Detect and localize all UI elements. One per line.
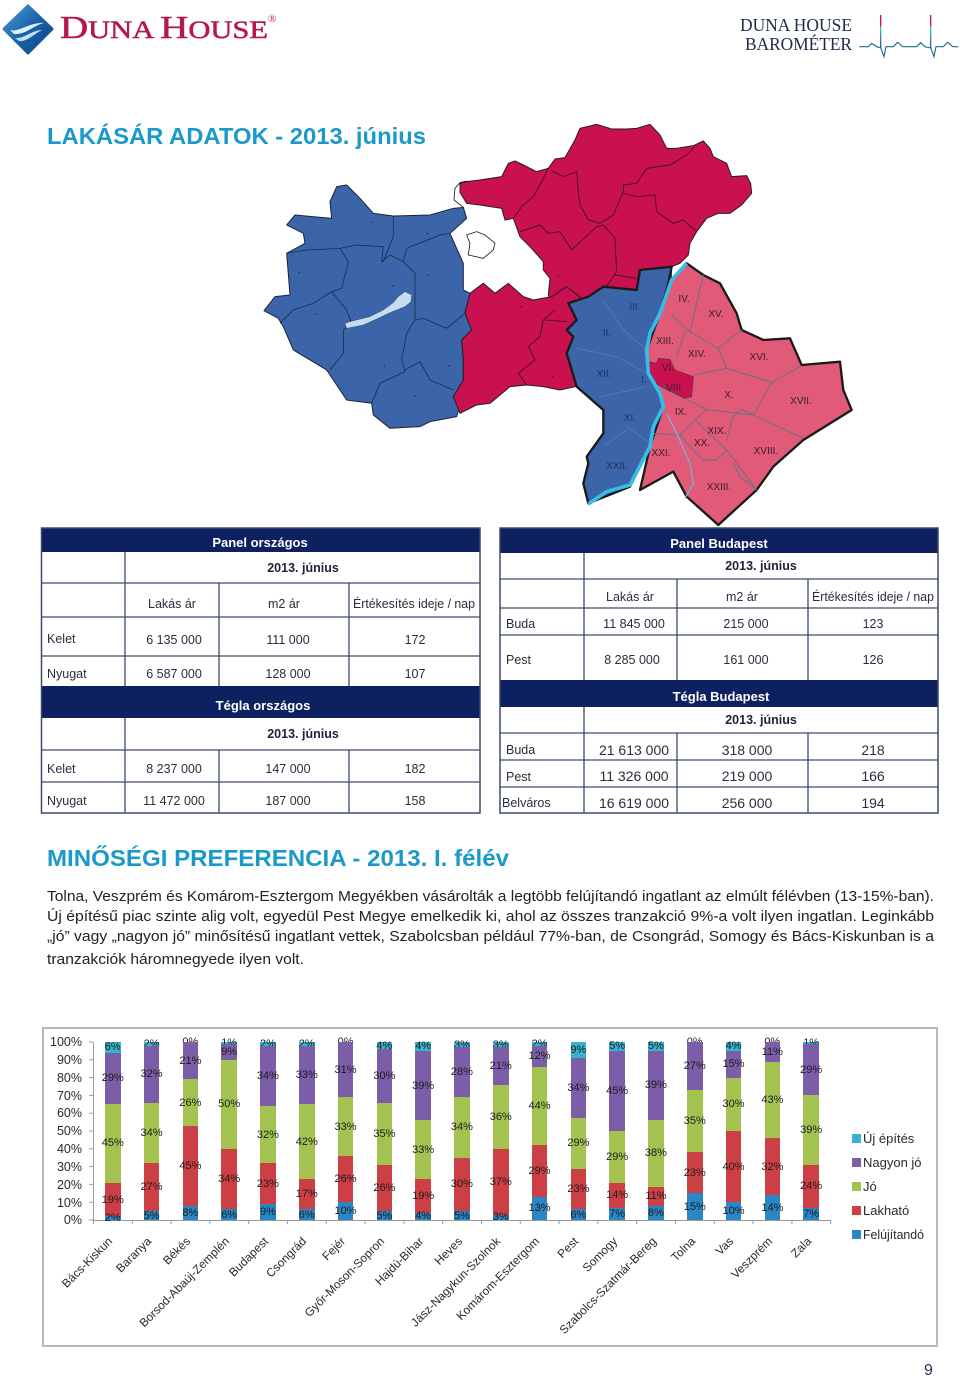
x axis county labels: Jász-Nagykun-Szolnok	[408, 1234, 503, 1329]
bar: Vas: 4%	[726, 1040, 742, 1052]
barometer wordmark: DUNA HOUSE	[740, 15, 852, 35]
map region: inner districts	[649, 358, 693, 398]
table: national prices: Kelet	[47, 762, 76, 776]
table: national prices: m2 ár	[268, 597, 300, 611]
y axis labels: 70%	[57, 1089, 82, 1103]
bar: Veszprém: 14%	[761, 1202, 783, 1214]
bar: Budapest: 9%	[260, 1206, 276, 1218]
text block: summary paragraph	[47, 889, 935, 968]
bar: Budapest: 32%	[257, 1129, 279, 1141]
x axis county labels: Szabolcs-Szatmár-Bereg	[556, 1234, 659, 1337]
y axis labels: 90%	[57, 1053, 82, 1067]
table: national prices: 147 000	[265, 762, 311, 776]
map markers: county seats	[299, 222, 559, 397]
legend: Új építés	[863, 1131, 915, 1146]
x axis county labels: Komárom-Esztergom	[453, 1234, 542, 1323]
district labels: Buda	[596, 302, 647, 472]
bar: Pest	[567, 1042, 589, 1221]
district labels: Pest: X.	[724, 390, 734, 401]
bar: Jász-Nagykun-Szolnok: 37%	[490, 1176, 512, 1188]
table header: Panel Budapest: Panel Budapest	[670, 536, 768, 551]
table: national prices: 182	[405, 762, 425, 776]
bar: Veszprém	[761, 1036, 783, 1220]
table: Budapest prices: 126	[863, 653, 883, 667]
district labels: Pest: XVI.	[750, 352, 768, 363]
table: national prices: 158	[405, 794, 425, 808]
bar: Szabolcs-Szatmár-Bereg: 38%	[645, 1147, 667, 1159]
y axis labels: 40%	[57, 1142, 82, 1156]
bar: Győr-Moson-Sopron: 5%	[376, 1210, 392, 1222]
bar: Szabolcs-Szatmár-Bereg: 5%	[648, 1040, 664, 1052]
x axis county labels	[59, 1234, 814, 1337]
table: national prices: Nyugat	[47, 667, 87, 681]
bar: Győr-Moson-Sopron: 35%	[373, 1128, 395, 1140]
y axis labels: 0%	[64, 1213, 82, 1227]
bar: Zala: 7%	[803, 1208, 819, 1220]
icon: heartbeat line	[859, 15, 958, 57]
legend: Jó	[863, 1179, 877, 1194]
bar: Jász-Nagykun-Szolnok: 21%	[490, 1060, 512, 1072]
axes	[89, 1042, 831, 1224]
bar: Békés: 45%	[179, 1160, 201, 1172]
district labels: Pest: XX.	[694, 438, 710, 449]
bar: Komárom-Esztergom: 2%	[532, 1038, 548, 1050]
bar: Pest: 9%	[570, 1044, 586, 1056]
bar: Jász-Nagykun-Szolnok: 36%	[490, 1111, 512, 1123]
bar: Komárom-Esztergom: 44%	[529, 1100, 551, 1112]
district labels: Buda: I.	[641, 375, 647, 386]
district labels: Pest: XXIII.	[707, 482, 731, 493]
x axis county labels: Heves	[432, 1234, 465, 1268]
bar: Csongrád: 17%	[296, 1188, 318, 1200]
bar: Pest: 23%	[567, 1183, 589, 1195]
page number: 9	[924, 1362, 933, 1379]
table: Budapest prices: m2 ár	[726, 590, 758, 604]
legend: Lakható	[863, 1203, 909, 1218]
table: Budapest prices: 218	[861, 742, 885, 758]
bar: Bács-Kiskun: 29%	[102, 1072, 124, 1084]
table: Budapest prices: 161 000	[723, 653, 769, 667]
bar: Csongrád: 2%	[299, 1038, 315, 1050]
table: national prices: 111 000	[266, 633, 310, 647]
table: Budapest prices: 318 000	[722, 742, 773, 758]
district labels: Pest: XVIII.	[754, 446, 778, 457]
table: national prices: 6 587 000	[146, 667, 202, 681]
table: national prices: 8 237 000	[146, 762, 202, 776]
logo: Duna House Barométer	[740, 15, 958, 57]
icon: blue diamond	[4, 6, 52, 53]
district labels: Pest: XIV.	[688, 349, 706, 360]
bar: Szabolcs-Szatmár-Bereg: 8%	[648, 1207, 664, 1219]
map inset: Budapest districts	[567, 263, 852, 525]
district labels: Buda: XII.	[596, 369, 612, 380]
bar: Budapest: 34%	[257, 1070, 279, 1082]
bar: Veszprém: 43%	[761, 1094, 783, 1106]
bar: Szabolcs-Szatmár-Bereg: 39%	[645, 1079, 667, 1091]
bar: Pest: 34%	[567, 1082, 589, 1094]
bar: Tolna: 0%	[687, 1036, 703, 1048]
bar: Bács-Kiskun: 19%	[102, 1194, 124, 1206]
x axis county labels: Győr-Moson-Sopron	[302, 1234, 387, 1320]
table: Budapest prices: 219 000	[722, 768, 773, 784]
district labels: Pest	[652, 294, 812, 493]
table: national prices: 11 472 000	[143, 794, 205, 808]
table: Budapest prices: Pest	[506, 653, 532, 667]
bar: Heves: 5%	[454, 1210, 470, 1222]
bar: Jász-Nagykun-Szolnok	[490, 1039, 512, 1223]
table: Budapest prices: 194	[861, 795, 885, 811]
table: Budapest prices: 215 000	[723, 617, 769, 631]
table: Budapest prices: Lakás ár	[606, 590, 654, 604]
bar: Vas: 40%	[723, 1161, 745, 1173]
legend	[852, 1131, 924, 1242]
x axis county labels: Vas	[712, 1234, 736, 1258]
x axis county labels: Baranya	[113, 1234, 154, 1275]
table: national prices: Kelet	[47, 632, 76, 646]
district labels: Pest: VI.	[662, 363, 674, 374]
bar: Békés: 0%	[182, 1036, 198, 1048]
registered mark: ®	[268, 13, 276, 25]
bar: Baranya: 5%	[144, 1210, 160, 1222]
y axis labels	[50, 1035, 82, 1227]
bar: Vas: 30%	[723, 1098, 745, 1110]
bar: Somogy: 7%	[609, 1208, 625, 1220]
y axis labels: 80%	[57, 1071, 82, 1085]
bar: Szabolcs-Szatmár-Bereg: 11%	[645, 1190, 667, 1202]
table: Budapest prices: 11 845 000	[603, 617, 665, 631]
legend: Nagyon jó	[863, 1155, 922, 1170]
table: national prices: 6 135 000	[146, 633, 202, 647]
bar: Budapest: 23%	[257, 1178, 279, 1190]
map region: Lake Balaton	[345, 292, 412, 328]
table: national prices: 187 000	[265, 794, 311, 808]
logo wordmark: DUNA HOUSE	[60, 9, 268, 45]
district labels: Buda: III.	[629, 302, 641, 313]
bar: Baranya: 34%	[141, 1127, 163, 1139]
x axis county labels: Pest	[555, 1234, 582, 1261]
bar: Pest: 6%	[570, 1209, 586, 1221]
bar: Békés: 26%	[179, 1097, 201, 1109]
x axis county labels: Hajdú-Bihar	[372, 1234, 426, 1288]
bar: Zala: 1%	[803, 1037, 819, 1049]
bar: Fejér: 10%	[335, 1205, 357, 1217]
table header: Tégla országos: Tégla országos	[216, 698, 310, 713]
text block: summary paragraph: „jó” vagy „nagyon jó” minősítésű ingatlant vettek, Szabolcsban például 77%-ban, de Csongrád, Somogy és Bács-Kiskunban is a	[47, 929, 935, 945]
table: national prices: Értékesítés ideje / nap	[353, 596, 475, 611]
bar: Borsod-Abaúj-Zemplén: 6%	[221, 1209, 237, 1221]
bar: Baranya: 2%	[144, 1038, 160, 1050]
bar: Hajdú-Bihar	[412, 1040, 434, 1222]
text block: summary paragraph: Új építésű piac szinte alig volt, egyedül Pest Megye emelkedik ki, ahol az összes tranzakció 9%-a volt ilyen ingatlan. Leginkább	[47, 908, 934, 925]
bar: Vas	[722, 1040, 745, 1220]
bar: Veszprém: 11%	[762, 1046, 783, 1058]
table: Budapest prices: 21 613 000	[599, 742, 669, 758]
table header: Tégla Budapest: Tégla Budapest	[673, 689, 770, 704]
bar: Komárom-Esztergom	[528, 1038, 551, 1220]
bar: Csongrád: 33%	[296, 1069, 318, 1081]
river: Danube	[588, 263, 687, 504]
x axis county labels: Somogy	[580, 1234, 620, 1275]
bar: Heves: 28%	[451, 1066, 473, 1078]
table: Budapest prices: Pest	[506, 770, 532, 784]
bar: Komárom-Esztergom: 12%	[529, 1050, 551, 1062]
bar: Bács-Kiskun: 6%	[105, 1041, 121, 1053]
bar: Zala: 29%	[800, 1064, 822, 1076]
bar: Zala: 39%	[800, 1124, 822, 1136]
bar: Heves	[451, 1039, 473, 1222]
heading: quality preference: MINŐSÉGI PREFERENCIA - 2013. I. félév	[47, 844, 509, 871]
bar: Vas: 10%	[723, 1205, 745, 1217]
district labels: Buda: XXII.	[606, 461, 628, 472]
bar: Tolna	[684, 1036, 706, 1220]
bar: Baranya: 27%	[141, 1181, 163, 1193]
bar: Tolna: 23%	[684, 1167, 706, 1179]
legend: Felújítandó	[863, 1227, 924, 1242]
table: Budapest prices: 11 326 000	[599, 768, 669, 784]
x axis county labels: Csongrád	[263, 1234, 309, 1280]
bar: Hajdú-Bihar: 4%	[415, 1040, 431, 1052]
x axis county labels: Békés	[160, 1234, 193, 1267]
district labels: Pest: VIII.	[666, 383, 684, 394]
y axis labels: 30%	[57, 1160, 82, 1174]
bar: Hajdú-Bihar: 39%	[412, 1080, 434, 1092]
x axis county labels: Borsod-Abaúj-Zemplén	[136, 1234, 232, 1330]
table: Budapest prices: Értékesítés ideje / nap	[812, 589, 934, 604]
table: national prices: 172	[405, 633, 425, 647]
table: national prices: 2013. június	[267, 727, 339, 741]
bar: Borsod-Abaúj-Zemplén	[218, 1037, 240, 1221]
y axis labels: 10%	[57, 1196, 82, 1210]
bar: Bács-Kiskun: 2%	[105, 1212, 121, 1224]
bar: Komárom-Esztergom: 29%	[529, 1165, 551, 1177]
bar: Heves: 3%	[454, 1039, 470, 1051]
x axis county labels: Bács-Kiskun	[59, 1234, 115, 1290]
bar: Tolna: 35%	[684, 1115, 706, 1127]
bar: Somogy	[606, 1040, 628, 1220]
bar: Heves: 34%	[451, 1121, 473, 1133]
table: Budapest prices: Belváros	[502, 796, 551, 810]
table header: Tégla Budapest	[500, 680, 938, 707]
district labels: Pest: XXI.	[652, 448, 670, 459]
y axis labels: 100%	[50, 1035, 82, 1049]
bar: Zala: 24%	[800, 1180, 822, 1192]
bar: Borsod-Abaúj-Zemplén: 9%	[221, 1046, 237, 1058]
bar: Somogy: 29%	[606, 1151, 628, 1163]
bar: Borsod-Abaúj-Zemplén: 1%	[221, 1037, 237, 1049]
table: Budapest prices: 16 619 000	[599, 795, 669, 811]
bar: Hajdú-Bihar: 33%	[412, 1144, 434, 1156]
bar: Békés: 21%	[179, 1055, 201, 1067]
bar: Csongrád: 6%	[299, 1209, 315, 1221]
x axis county labels: Fejér	[319, 1234, 348, 1263]
map region: western Hungary	[264, 181, 583, 428]
bar: Hajdú-Bihar: 4%	[415, 1210, 431, 1222]
bar: Tolna: 27%	[684, 1060, 706, 1072]
x axis county labels: Veszprém	[728, 1234, 775, 1281]
table header: Panel Budapest	[500, 528, 938, 553]
text block: summary paragraph: Tolna, Veszprém és Komárom-Esztergom Megyékben vásárolták a legtöbb felújítandó ingatlant az elmúlt félévben (13-15%-ban).	[47, 889, 934, 905]
bar: Baranya: 32%	[141, 1068, 163, 1080]
bar: Békés	[179, 1036, 201, 1220]
table header: Panel országos	[41, 528, 480, 552]
x axis county labels: Budapest	[226, 1234, 272, 1279]
map region: eastern Hungary north	[460, 124, 752, 315]
map region: central Hungary outline	[454, 181, 467, 207]
river: Ráckeve branch	[667, 413, 693, 498]
map: Hungary and Budapest	[264, 124, 852, 525]
bar: Budapest	[257, 1038, 279, 1220]
bar: Bács-Kiskun	[102, 1041, 124, 1224]
table: national prices: Lakás ár	[148, 597, 196, 611]
bar: Bács-Kiskun: 45%	[102, 1137, 124, 1149]
bar: Fejér: 31%	[335, 1064, 357, 1076]
table: national prices: Nyugat	[47, 794, 87, 808]
bar: Szabolcs-Szatmár-Bereg	[645, 1040, 667, 1220]
table: Budapest prices: 2013. június	[725, 559, 797, 573]
bar: Győr-Moson-Sopron: 30%	[373, 1070, 395, 1082]
bar: Győr-Moson-Sopron: 26%	[373, 1182, 395, 1194]
bar: Zala	[800, 1037, 822, 1220]
bar: Győr-Moson-Sopron	[373, 1040, 395, 1222]
bar: Heves: 30%	[451, 1178, 473, 1190]
bar: Fejér: 33%	[335, 1121, 357, 1133]
district labels: Pest: XVII.	[790, 396, 812, 407]
bar: Hajdú-Bihar: 19%	[412, 1190, 434, 1202]
table header: Panel országos: Panel országos	[212, 535, 308, 550]
table: national prices: 128 000	[265, 667, 311, 681]
table: Budapest prices: Buda	[506, 743, 535, 757]
table: national prices	[41, 528, 480, 813]
x axis county labels: Zala	[788, 1234, 814, 1260]
table: Budapest prices: 2013. június	[725, 713, 797, 727]
district labels: Buda: XI.	[624, 413, 636, 424]
bar: Borsod-Abaúj-Zemplén: 50%	[218, 1098, 240, 1110]
table: Budapest prices: 256 000	[722, 795, 773, 811]
bar: Győr-Moson-Sopron: 4%	[376, 1040, 392, 1052]
chart: stacked bars of quality preference by county	[42, 1027, 938, 1347]
table: Budapest prices: 166	[861, 768, 885, 784]
table: Budapest prices	[500, 528, 938, 813]
bar: Jász-Nagykun-Szolnok: 3%	[493, 1211, 509, 1223]
bar: Vas: 15%	[723, 1058, 745, 1070]
bar: Somogy: 5%	[609, 1040, 625, 1052]
bar: Budapest: 2%	[260, 1038, 276, 1050]
table: national prices: 107	[405, 667, 425, 681]
district labels: Buda: II.	[603, 328, 611, 339]
y axis labels: 60%	[57, 1106, 82, 1120]
text block: summary paragraph: tranzakciók háromnegyede ilyen volt.	[47, 952, 304, 968]
logo: Duna House	[4, 6, 276, 53]
district labels: Pest: IV.	[678, 294, 690, 305]
x axis county labels: Tolna	[668, 1234, 698, 1264]
bar: Somogy: 14%	[606, 1189, 628, 1201]
bar: Fejér: 26%	[335, 1173, 357, 1185]
title: LAKÁSÁR ADATOK - 2013. június	[47, 122, 426, 149]
map region: southern Great Plain	[453, 283, 583, 413]
district labels: Pest: XIX.	[708, 426, 726, 437]
bar: Veszprém: 0%	[764, 1036, 780, 1048]
district labels: Pest: XIII.	[656, 336, 674, 347]
table: national prices: 2013. június	[267, 561, 339, 575]
bar: Tolna: 15%	[684, 1201, 706, 1213]
barometer wordmark: BAROMÉTER	[745, 34, 852, 54]
district labels: Pest: IX.	[675, 407, 687, 418]
bar: Borsod-Abaúj-Zemplén: 34%	[218, 1173, 240, 1185]
table: Budapest prices: Buda	[506, 617, 535, 631]
bar: Somogy: 45%	[606, 1085, 628, 1097]
y axis labels: 50%	[57, 1124, 82, 1138]
district labels: Pest: XV.	[708, 309, 724, 320]
bar: Pest: 29%	[567, 1137, 589, 1149]
table header: Tégla országos	[41, 686, 480, 718]
table: Budapest prices: 123	[863, 617, 883, 631]
bar: Jász-Nagykun-Szolnok: 3%	[493, 1039, 509, 1051]
bar: Baranya	[141, 1038, 163, 1222]
table: Budapest prices: 8 285 000	[604, 653, 660, 667]
y axis labels: 20%	[57, 1178, 82, 1192]
barometer wordmark	[740, 15, 852, 54]
bar: Komárom-Esztergom: 13%	[529, 1202, 551, 1214]
bar: Békés: 8%	[182, 1207, 198, 1219]
bar: Csongrád	[296, 1038, 318, 1221]
bar: Csongrád: 42%	[296, 1136, 318, 1148]
bar: Fejér: 0%	[338, 1036, 354, 1048]
bar: Veszprém: 32%	[761, 1161, 783, 1173]
bar: Fejér	[335, 1036, 357, 1220]
